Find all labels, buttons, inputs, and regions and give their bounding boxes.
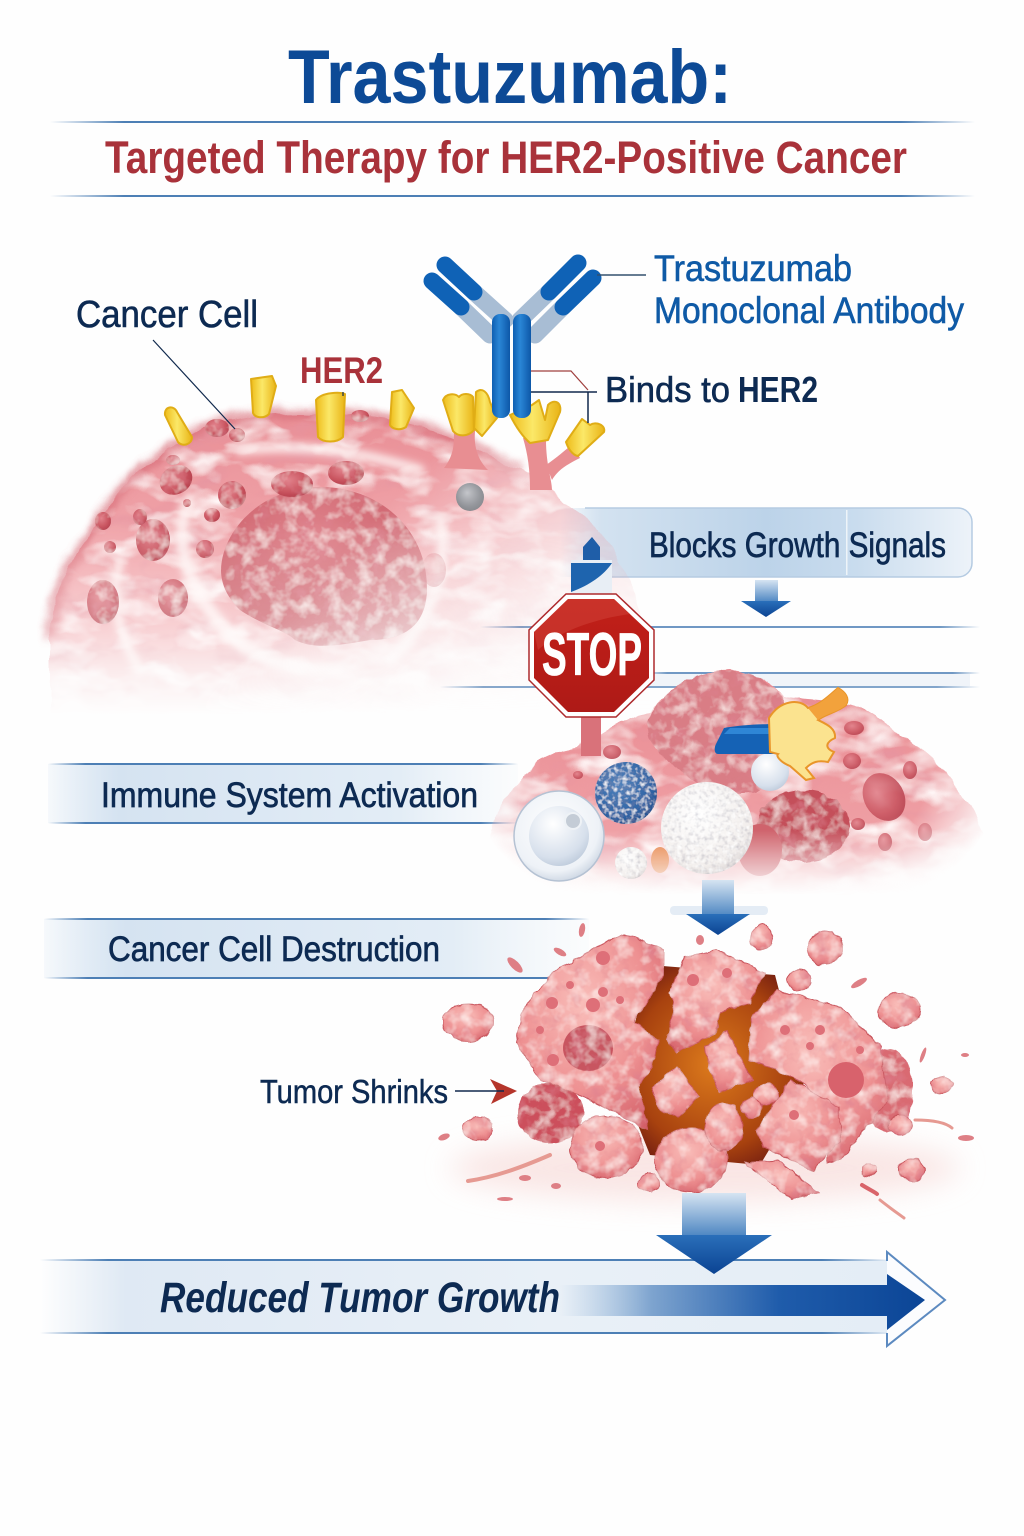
cell body <box>51 413 650 730</box>
raised lump <box>648 670 785 794</box>
subtitle: Targeted Therapy for HER2-Positive Cancer <box>105 132 907 183</box>
lower right chunk <box>756 1080 841 1170</box>
receptor 1 <box>165 407 192 445</box>
receptor cluster 5 <box>443 394 474 435</box>
right piece <box>749 990 888 1163</box>
centre chunk <box>706 1030 752 1092</box>
label: trastuzumab monoclonal antibody: Monoclonal Antibody <box>654 290 964 331</box>
receptor 4 <box>390 390 414 429</box>
lower centre chunk <box>652 1067 699 1117</box>
blue lymphocyte <box>595 762 657 824</box>
receptor 3 <box>316 393 345 442</box>
receptor 2 <box>251 376 276 417</box>
label: binds to HER2 <box>605 369 818 410</box>
antibody <box>432 263 593 418</box>
sign post <box>581 712 601 756</box>
macrophage ring cell <box>514 791 604 881</box>
banner: reduced tumor growth <box>40 1252 945 1346</box>
tumor surface nodules <box>536 951 864 1151</box>
left piece <box>516 935 663 1130</box>
solid gradient arrow <box>560 1274 925 1330</box>
immune cells <box>514 688 847 881</box>
leader lines <box>153 275 646 429</box>
label: cancer cell: Cancer Cell <box>76 294 258 336</box>
tumor core <box>620 965 805 1165</box>
tumor fragments <box>516 935 888 1199</box>
label: binds to HER2: HER2 <box>738 369 818 410</box>
label: binds to HER2: Binds to <box>605 369 730 410</box>
shards <box>437 923 974 1201</box>
illustration: destroyed tumor <box>437 923 974 1218</box>
stop sign <box>529 537 654 756</box>
receptor 7 <box>566 419 604 456</box>
illustration: cancer cell <box>51 410 650 730</box>
yellow receptor piece <box>769 688 847 780</box>
top centre piece <box>666 950 766 1053</box>
label: blocks growth signals: Blocks Growth Signals <box>649 526 946 565</box>
red lump cluster <box>757 790 849 862</box>
title: Trastuzumab: <box>288 35 732 120</box>
stem left <box>492 314 510 418</box>
hinge arms <box>462 293 562 335</box>
cytoplasm nodules <box>87 410 446 624</box>
label: tumor shrinks: Tumor Shrinks <box>260 1073 448 1110</box>
floating debris <box>443 925 953 1181</box>
lower left dark lump <box>517 1083 583 1143</box>
big nodule on left piece <box>563 1025 613 1071</box>
silver cell <box>751 753 789 791</box>
far right lump <box>863 1048 913 1132</box>
label: trastuzumab monoclonal antibody: Trastuzumab <box>654 248 852 289</box>
light streaks <box>116 448 443 670</box>
bottom lumps <box>570 1116 642 1178</box>
fab tips <box>432 263 593 307</box>
tumor body <box>492 669 980 887</box>
receptor stalks <box>444 425 580 490</box>
blue antibody wedge <box>715 724 784 754</box>
label: reduced tumor growth: Reduced Tumor Growth <box>160 1274 560 1322</box>
banner: blocks growth signals <box>560 508 972 577</box>
orange spot <box>651 847 669 873</box>
post top blue sleeve <box>571 560 612 594</box>
HER2 receptors <box>165 376 604 456</box>
bottom flat chunk <box>745 1160 820 1199</box>
stem right <box>513 314 531 418</box>
debris streaks <box>468 1120 952 1218</box>
small centre pieces <box>754 1084 778 1106</box>
arrow: tumor shrinks <box>455 1079 517 1104</box>
label: cancer cell destruction: Cancer Cell Destruction <box>108 930 440 969</box>
octagon <box>529 594 654 717</box>
receptor cluster 6 <box>510 400 560 443</box>
STOP text: STOP <box>542 621 642 688</box>
label: trastuzumab monoclonal antibody <box>654 248 964 331</box>
up arrow tip <box>583 537 600 560</box>
arrow: down to destruction <box>670 880 768 935</box>
arrow: down to reduced growth <box>656 1193 772 1274</box>
ground stain <box>450 1134 960 1202</box>
arrow: down from blocks banner <box>741 580 791 617</box>
white cell small <box>615 847 647 879</box>
nucleus <box>221 487 427 646</box>
banner: cancer cell destruction <box>44 918 589 979</box>
white cell large <box>661 782 753 874</box>
decorative band lines middle <box>440 626 980 688</box>
grey vesicle <box>456 483 484 511</box>
divider line top <box>50 121 975 123</box>
label: HER2: HER2 <box>300 350 383 391</box>
outline arrowhead <box>887 1252 945 1346</box>
illustration: immune-attacked tumor <box>492 669 980 887</box>
label: immune system activation: Immune System Activation <box>101 776 478 815</box>
tumor nodules <box>573 721 932 851</box>
divider line bottom <box>50 195 975 197</box>
banner: immune system activation <box>48 763 518 824</box>
